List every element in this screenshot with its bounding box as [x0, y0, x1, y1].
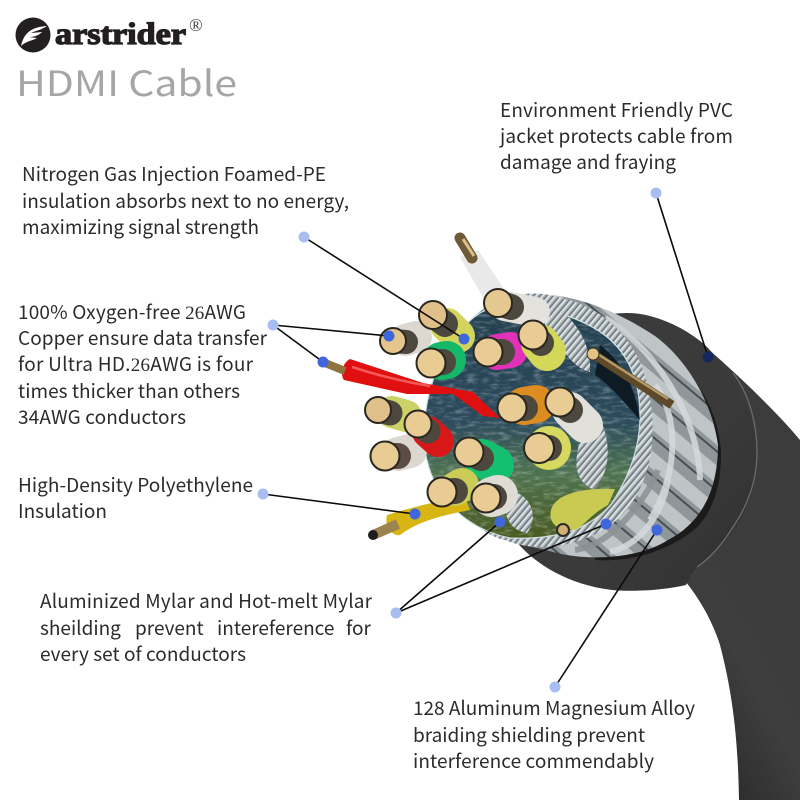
text: mylar	[40, 587, 373, 667]
text: foamed PE: insulation absorbs next to no energy,	[22, 187, 349, 214]
text: mylar: every set of conductors	[40, 640, 246, 667]
conductor: orange	[498, 394, 536, 422]
text: braiding	[413, 694, 695, 774]
cable illustration	[325, 238, 800, 800]
conductor: white right	[546, 388, 585, 425]
conductor: white bottom	[472, 484, 500, 512]
conductor: yellow bottom	[428, 478, 462, 506]
text: mylar: intereference	[217, 614, 334, 641]
logo: Arstrider	[16, 15, 203, 52]
text: mylar: for	[346, 614, 371, 641]
text: mylar: prevent	[135, 614, 204, 641]
gold drain wire	[587, 348, 672, 405]
core texture	[424, 304, 640, 538]
disc rim highlight	[697, 373, 757, 567]
text: copper: 34AWG conductors	[18, 403, 186, 430]
text: polyethylene: High-Density Polyethylene	[18, 471, 253, 498]
conductor: white lower left	[370, 442, 410, 470]
bent yellow wire	[550, 489, 615, 536]
red wire	[325, 359, 500, 418]
text: copper: Copper ensure data transfer	[18, 324, 268, 351]
text: foamed PE: Nitrogen Gas Injection Foamed-PE	[22, 160, 326, 187]
conductor: white top	[484, 289, 535, 317]
text: copper: times thicker than others	[18, 377, 240, 404]
cable body	[660, 342, 800, 800]
yellow wire	[368, 497, 470, 540]
white wire with gold tip	[460, 238, 510, 310]
text: copper: for Ultra HD.26AWG is four	[18, 350, 254, 377]
text: PVC jacket: jacket protects cable from	[499, 122, 733, 149]
aluminum braid	[500, 295, 718, 557]
conductor: green lower	[454, 438, 495, 466]
dark shadow behind braid	[595, 320, 721, 560]
inner core	[424, 304, 640, 538]
conductor: yellow lower right	[524, 426, 571, 470]
text: PVC jacket	[499, 96, 733, 175]
logo wordmark: arstrider	[55, 16, 186, 51]
text: copper: 100% Oxygen-free 26AWG	[18, 298, 246, 325]
text: foamed PE: maximizing signal strength	[22, 213, 259, 240]
conductor: red	[404, 410, 438, 441]
text: foamed PE	[22, 160, 349, 240]
text: mylar: Aluminized Mylar and Hot-melt Mylar	[40, 587, 373, 614]
silver foil swirls	[505, 300, 640, 533]
text: polyethylene: Insulation	[18, 497, 107, 524]
text: braiding: interference commendably	[413, 747, 654, 774]
braid overlay strands	[575, 318, 700, 552]
logo emblem	[16, 18, 50, 52]
conductor: yellow upper left	[419, 301, 458, 336]
text: PVC jacket: damage and fraying	[500, 148, 676, 175]
conductor: magenta	[474, 338, 510, 366]
conductor: white left	[380, 328, 416, 354]
conductor: green	[416, 348, 447, 378]
conductor: yellow upper right	[518, 320, 548, 352]
registered mark: ®	[189, 15, 203, 35]
text: braiding: braiding shielding prevent	[413, 721, 645, 748]
title: HDMI Cable	[16, 56, 237, 107]
aluminized mylar wrap	[459, 293, 653, 547]
text: polyethylene	[18, 471, 253, 524]
leader lines	[263, 193, 708, 687]
text: copper	[18, 298, 268, 430]
text: mylar: sheilding	[40, 614, 121, 641]
callout dots	[258, 188, 714, 692]
conductor: yellow left	[365, 397, 406, 423]
jacket disc	[515, 313, 757, 591]
text: braiding: 128 Aluminum Magnesium Alloy	[413, 694, 695, 721]
text: PVC jacket: Environment Friendly PVC	[500, 96, 733, 123]
